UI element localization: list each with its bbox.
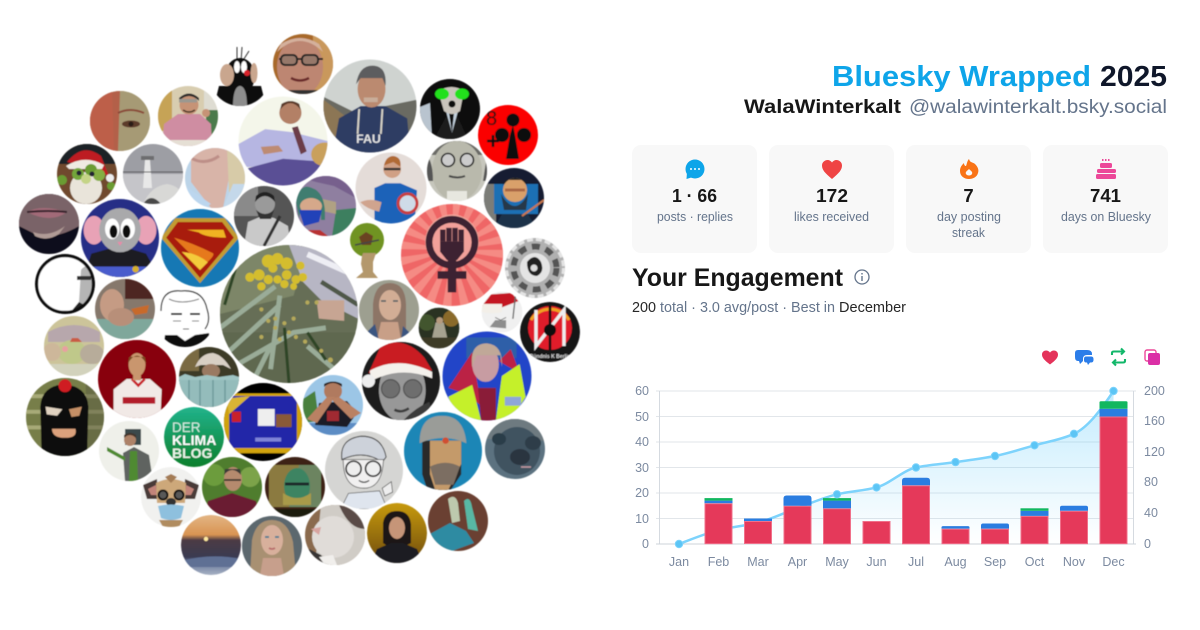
avatar: DK berlin emblem: Bündnis K Berlin bbox=[530, 354, 570, 360]
avatar: klima blog logo: DER bbox=[172, 420, 201, 435]
month labels: Oct bbox=[1025, 555, 1045, 569]
stat card: day posting streak: streak bbox=[952, 225, 985, 240]
right axis labels: 120 bbox=[1144, 445, 1165, 459]
cumulative area bbox=[679, 391, 1114, 544]
stacked bars bbox=[704, 401, 1128, 544]
left axis labels: 0 bbox=[642, 537, 649, 551]
icon: likes heart bbox=[1042, 350, 1058, 364]
avatar: masked kid bbox=[296, 176, 356, 236]
avatar bubble cluster bbox=[19, 34, 580, 576]
avatar: klima blog logo: KLIMA bbox=[172, 432, 216, 448]
avatar: hi-vis jacket woman bbox=[443, 332, 531, 420]
avatar: FAU hoodie man: FAU bbox=[356, 132, 381, 146]
legend: likes, replies, reposts, quotes bbox=[1042, 348, 1160, 366]
left axis labels: 20 bbox=[635, 486, 649, 500]
avatar: FAU hoodie man bbox=[324, 60, 416, 152]
engagement summary: 200 bbox=[632, 300, 656, 316]
avatar: woman on gold bbox=[367, 503, 427, 563]
stat card: days on Bluesky: 741 bbox=[1090, 185, 1121, 206]
avatar: acacia flower macro bbox=[220, 245, 358, 383]
avatar: dog with green glasses bbox=[420, 79, 480, 139]
avatar: ape bbox=[485, 419, 545, 479]
month labels: Feb bbox=[708, 555, 729, 569]
stat card: day posting streak bbox=[906, 145, 1031, 253]
month labels: Jun bbox=[866, 555, 887, 569]
stat card: posts and replies: posts · replies bbox=[657, 209, 733, 224]
avatar: praying hands man bbox=[303, 375, 363, 435]
right axis labels: 0 bbox=[1144, 537, 1151, 551]
icon: chat bubble bbox=[686, 160, 704, 179]
left axis labels bbox=[635, 384, 649, 551]
avatar: hat behind fence bbox=[179, 347, 239, 407]
month labels: Aug bbox=[944, 555, 967, 569]
avatar: klima blog logo bbox=[164, 407, 224, 467]
avatar: man with glasses top bbox=[273, 34, 333, 96]
avatar: game boy portrait bbox=[265, 457, 325, 517]
avatar: feet in jeans bbox=[428, 491, 488, 551]
user display name: WalaWinterkalt bbox=[744, 97, 902, 118]
avatar: lips bbox=[19, 194, 79, 254]
avatar: blonde neck bbox=[185, 148, 245, 208]
avatar: sunset bbox=[181, 515, 241, 575]
avatar: blue shirt man bbox=[356, 153, 426, 223]
avatar: mole bbox=[214, 47, 266, 106]
month labels: Jul bbox=[908, 555, 924, 569]
avatar: maroon shirt man bbox=[202, 457, 262, 517]
avatar: space mouse bbox=[81, 199, 159, 277]
avatar: feminist fist symbol bbox=[401, 204, 503, 306]
avatar: hyena with mask bbox=[141, 467, 201, 527]
avatar: chocolate bar bbox=[224, 383, 302, 461]
left axis labels: 10 bbox=[635, 512, 649, 526]
avatar: painted beard man bbox=[484, 168, 544, 228]
avatar: bw ornament bbox=[505, 238, 565, 298]
stat card: posts and replies bbox=[632, 145, 757, 253]
avatar: red club card: 8 bbox=[486, 108, 497, 130]
avatar: DK berlin emblem bbox=[520, 302, 580, 362]
month labels: Jan bbox=[669, 555, 689, 569]
left axis labels: 30 bbox=[635, 461, 649, 475]
title: 2025 bbox=[1100, 61, 1167, 93]
avatar: santa hat sketch bbox=[482, 292, 522, 332]
stat card: likes received: 172 bbox=[816, 185, 848, 206]
month labels: Sep bbox=[984, 555, 1006, 569]
icon: quotes squares bbox=[1145, 350, 1160, 365]
avatar: tree illustration bbox=[350, 223, 384, 278]
avatar: bathing figures bbox=[95, 279, 155, 339]
month labels: Nov bbox=[1063, 555, 1086, 569]
avatar: pink hoodie man bbox=[158, 86, 218, 146]
avatar: knight portrait bbox=[404, 412, 482, 490]
icon: cake bbox=[1096, 159, 1116, 179]
avatar: superman shield bbox=[161, 209, 239, 287]
icon: reposts arrows bbox=[1112, 348, 1125, 366]
right axis labels bbox=[1144, 384, 1165, 551]
avatar: grey tower bbox=[123, 144, 183, 204]
avatar: bw man guitar bbox=[234, 186, 294, 246]
engagement summary: December bbox=[839, 300, 906, 316]
icon: replies bubbles bbox=[1075, 350, 1094, 365]
right axis labels: 40 bbox=[1144, 506, 1158, 520]
engagement summary: total · 3.0 avg/post · Best in bbox=[660, 300, 835, 316]
avatar: blonde portrait bbox=[242, 516, 302, 576]
grid lines bbox=[656, 391, 1136, 544]
avatar: drawing with round glasses bbox=[325, 431, 403, 509]
avatar: pastel creature bbox=[43, 316, 104, 376]
stat card: likes received: likes received bbox=[794, 209, 869, 224]
right axis labels: 160 bbox=[1144, 414, 1165, 428]
title: Bluesky Wrapped bbox=[832, 61, 1091, 93]
avatar: balaclava bbox=[26, 378, 104, 456]
avatar: lying man in tie bbox=[239, 97, 338, 185]
stat card: days on Bluesky bbox=[1043, 145, 1168, 253]
avatar: santa hat woman bbox=[362, 342, 440, 421]
avatar: red football shirt bbox=[98, 340, 176, 418]
icon: flame bbox=[960, 159, 978, 179]
left axis labels: 60 bbox=[635, 384, 649, 398]
left axis labels: 50 bbox=[635, 410, 649, 424]
avatar: blonde woman bbox=[359, 280, 419, 340]
user handle: @walawinterkalt.bsky.social bbox=[909, 97, 1167, 118]
stat card: likes received bbox=[769, 145, 894, 253]
avatar: santa sprouts bbox=[57, 144, 117, 204]
month labels: Mar bbox=[747, 555, 769, 569]
avatar: red club card bbox=[478, 105, 538, 165]
avatar: sleeping cat bbox=[305, 505, 365, 565]
cumulative line bbox=[679, 391, 1114, 544]
avatar: tiny forest man bbox=[419, 308, 459, 348]
stat card: posts and replies: 1 · 66 bbox=[672, 185, 717, 206]
combo chart: monthly engagement bbox=[635, 384, 1165, 569]
stat card: days on Bluesky: days on Bluesky bbox=[1061, 209, 1151, 224]
heading: your engagement: Your Engagement bbox=[632, 264, 844, 292]
avatar: klima blog logo: BLOG bbox=[172, 445, 213, 461]
left axis labels: 40 bbox=[635, 435, 649, 449]
icon: info bbox=[855, 270, 869, 284]
avatar: ring with man bbox=[35, 254, 95, 314]
avatar: red woman eye bbox=[90, 91, 150, 151]
right axis labels: 80 bbox=[1144, 475, 1158, 489]
stat card: day posting streak: 7 bbox=[963, 185, 974, 206]
month labels: May bbox=[825, 555, 850, 569]
month labels: Apr bbox=[788, 555, 807, 569]
month labels bbox=[669, 555, 1125, 569]
right axis labels: 200 bbox=[1144, 384, 1165, 398]
month labels: Dec bbox=[1102, 555, 1125, 569]
engagement summary bbox=[632, 300, 906, 316]
avatar: man in grey jacket bbox=[99, 421, 159, 481]
avatar: bw glasses man bbox=[427, 141, 487, 201]
avatar: manga sketch bbox=[155, 287, 215, 347]
cumulative points bbox=[675, 387, 1117, 548]
stat card: day posting streak: day posting bbox=[937, 209, 1001, 224]
icon: heart bbox=[822, 160, 842, 179]
